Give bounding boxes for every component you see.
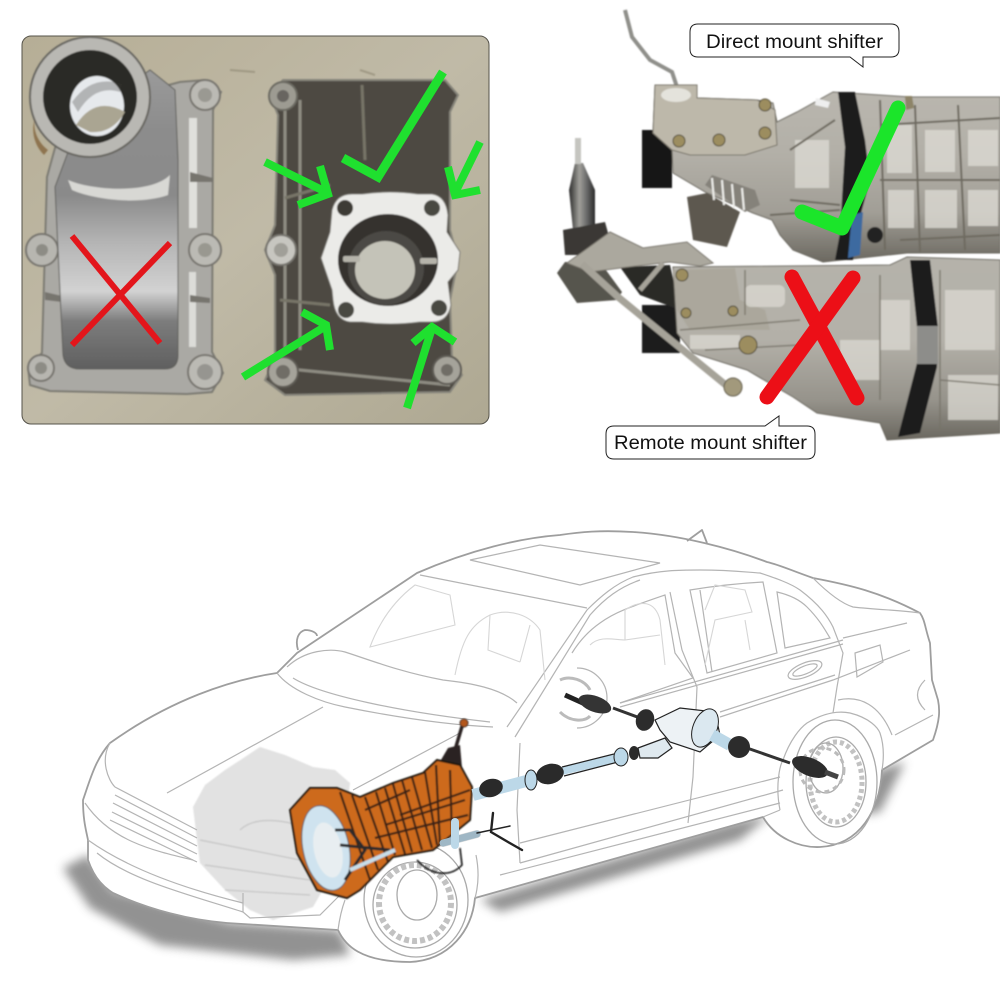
propeller shaft [473,738,672,800]
rear differential and half shafts [560,678,844,792]
callout: remote mount shifter: Remote mount shifter [614,432,808,454]
car body outline [83,530,939,962]
arrow: lower left green [243,312,330,377]
arrow: upper left green [265,162,328,205]
front wheel [364,843,468,957]
clutch slave and lever [443,813,522,850]
panel: transmissions comparison photo [557,10,1000,459]
mark: green check on housing [343,72,443,177]
ghost engine [193,747,350,920]
arrow: upper right green [448,142,480,195]
car body detail lines [85,545,933,930]
mark: red cross on remote mount [767,277,857,398]
callout: remote mount shifter [606,416,815,459]
mark: green check on direct mount [802,108,898,228]
photo: direct mount transmission [625,10,1000,262]
ground shadow [63,762,905,960]
callout: direct mount shifter: Direct mount shifter [706,31,884,53]
photo: remote mount transmission [557,138,1000,440]
transmission: orange gearbox [290,719,472,898]
photo: rejected remote shifter housing [26,37,223,394]
rear wheel [793,720,877,844]
photo: accepted direct shifter housing [265,80,462,395]
panel: housing comparison photo [22,36,489,424]
car interior seats [370,585,752,680]
arrow: lower right green [407,327,455,408]
mark: red cross on housing [72,236,170,345]
callout: direct mount shifter [690,24,899,67]
illustration: car cutaway with drivetrain [63,530,939,962]
